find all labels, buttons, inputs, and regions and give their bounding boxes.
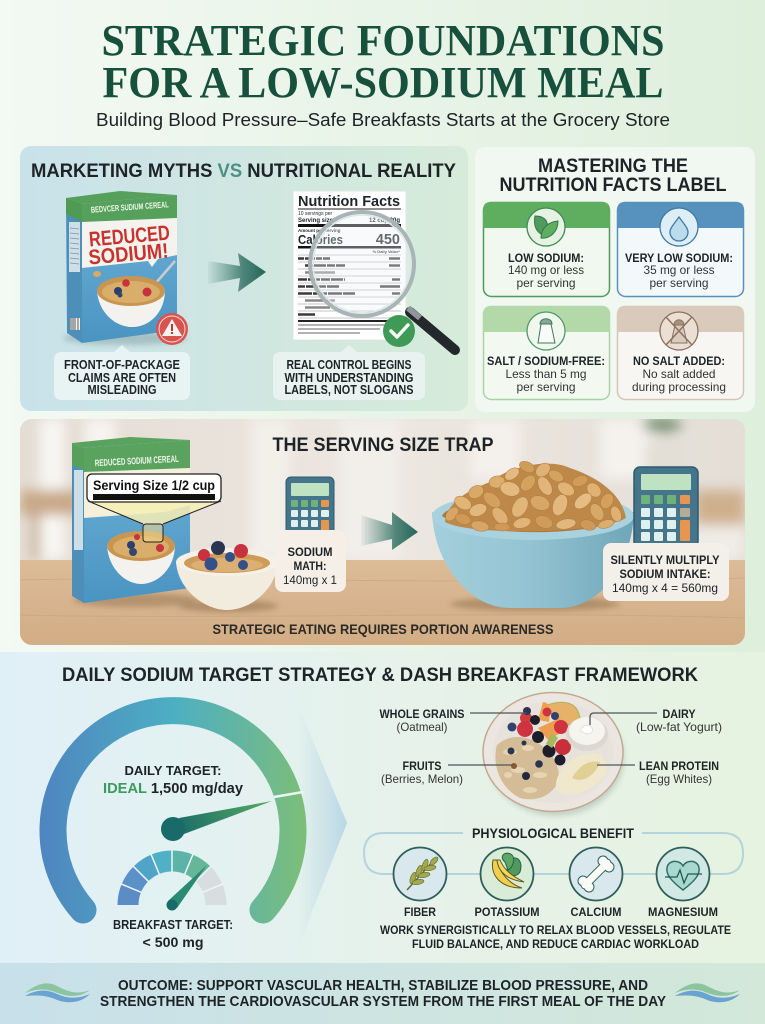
icon: check badge: [383, 315, 415, 347]
nutrient labels: POTASSIUM: [474, 905, 540, 919]
nutrient labels: [404, 905, 718, 919]
physiological benefit track: [364, 826, 743, 874]
icon: left wave: [25, 983, 90, 1002]
small bowl of cereal: [176, 541, 278, 612]
nutrition facts label with magnifier: 450: [376, 232, 400, 248]
subtitle: Building Blood Pressure–Safe Breakfasts Starts at the Grocery Store: [96, 110, 670, 130]
chart: breakfast target gauge: [121, 850, 223, 910]
callout: real control: [273, 345, 425, 400]
panel heading: MARKETING MYTHS VS NUTRITIONAL REALITY: [31, 161, 456, 182]
card: very low sodium: 35 mg or less: [644, 263, 714, 277]
panel: the serving size trap: [20, 417, 745, 645]
callout: whole grains: WHOLE GRAINS: [380, 707, 464, 721]
callout: lean protein: [597, 759, 719, 786]
card: salt sodium free: [483, 306, 610, 400]
panel heading: MASTERING THE: [538, 156, 688, 177]
nutrition facts label with magnifier: Calories: [298, 233, 343, 247]
physiological benefit track: PHYSIOLOGICAL BENEFIT: [472, 826, 635, 841]
callout: real control: REAL CONTROL BEGINS: [286, 358, 412, 372]
card: salt sodium free: Less than 5 mg: [506, 367, 586, 381]
gauge label: [103, 763, 243, 797]
callout: front of package: MISLEADING: [88, 383, 156, 397]
cereal box: reduced sodium claim: REDUCED: [88, 222, 171, 252]
cereal box with serving size callout: [72, 437, 221, 607]
nutrient labels: FIBER: [404, 905, 436, 919]
breakfast target label: < 500 mg: [142, 935, 204, 950]
callout: real control: LABELS, NOT SLOGANS: [284, 383, 414, 397]
callout: dairy: [590, 707, 722, 734]
gauge label: IDEAL 1,500 mg/day: [103, 781, 243, 797]
callout: sodium math: MATH:: [294, 559, 326, 573]
benefit description: [380, 923, 731, 951]
callout: silently multiply: SILENTLY MULTIPLY: [610, 553, 720, 567]
callout: real control: WITH UNDERSTANDING: [284, 371, 414, 385]
card: very low sodium: [617, 202, 744, 296]
nutrition facts label with magnifier: 12 cup 30g: [369, 218, 400, 224]
card: low sodium: [483, 202, 610, 296]
icon: magnesium heart: [656, 848, 710, 900]
cereal box: reduced sodium claim: SODIUM!: [88, 240, 169, 269]
callout: whole grains: (Oatmeal): [396, 720, 448, 734]
card: low sodium: LOW SODIUM:: [508, 251, 584, 265]
callout: whole grains: [380, 707, 527, 734]
breakfast target label: BREAKFAST TARGET:: [113, 918, 233, 932]
gauge needle: [161, 801, 272, 841]
outcome text: STRENGTHEN THE CARDIOVASCULAR SYSTEM FROM THE FIRST MEAL OF THE DAY: [100, 993, 666, 1010]
icon: calcium bone: [570, 848, 622, 900]
card: low sodium: 140 mg or less: [508, 263, 584, 277]
icon: calculator large: [634, 467, 698, 547]
callout: front of package: FRONT-OF-PACKAGE: [64, 358, 180, 372]
title: FOR A LOW-SODIUM MEAL: [102, 58, 664, 107]
callout: lean protein: (Egg Whites): [646, 772, 712, 786]
footer band: outcome: [0, 963, 765, 1024]
nutrition facts label with magnifier: % Daily Value*: [373, 249, 400, 254]
icon: calculator: [286, 476, 334, 530]
nutrition facts label with magnifier: Serving size: [298, 218, 334, 224]
breakfast plate illustration: [483, 692, 624, 816]
section heading: daily sodium target: DAILY SODIUM TARGET STRATEGY & DASH BREAKFAST FRAMEWORK: [62, 665, 698, 686]
title: STRATEGIC FOUNDATIONS: [102, 16, 664, 65]
callout: fruits: [381, 759, 513, 786]
cereal box: reduced sodium claim: [63, 191, 187, 345]
arrow: claim to label: [208, 253, 266, 292]
card: salt sodium free: per serving: [516, 380, 576, 394]
nutrition facts label with magnifier: 10 servings per: [298, 211, 333, 217]
icon: fiber wheat: [394, 848, 446, 900]
callout: sodium math: 140mg x 1: [283, 573, 337, 587]
icon: potassium banana and spinach: [480, 848, 534, 900]
callout: front of package: CLAIMS ARE OFTEN: [68, 371, 176, 385]
benefit description: FLUID BALANCE, AND REDUCE CARDIAC WORKLOAD: [412, 937, 699, 951]
nutrient labels: CALCIUM: [570, 905, 622, 919]
large bowl of cereal: [432, 459, 634, 611]
arrow: small to large portion: [361, 512, 418, 550]
callout: sodium math: SODIUM: [288, 545, 333, 559]
icon: right wave: [675, 983, 740, 1002]
card: very low sodium: VERY LOW SODIUM:: [625, 251, 733, 265]
chart: daily sodium gauge: [53, 711, 303, 910]
oatmeal: [495, 737, 559, 799]
cereal box with serving size callout: Serving Size 1/2 cup: [93, 477, 215, 493]
icon: warning badge: [156, 313, 188, 345]
nutrition facts label with magnifier: [293, 191, 455, 350]
callout: fruits: FRUITS: [402, 759, 442, 773]
card: no salt added: during processing: [632, 380, 726, 394]
nutrition facts label with magnifier: Nutrition Facts: [298, 194, 400, 210]
panel heading: [500, 156, 727, 196]
breakfast target label: [113, 918, 233, 950]
cereal box with serving size callout: REDUCED SODIUM CEREAL: [95, 454, 179, 469]
callout: silently multiply: [603, 543, 729, 601]
title: [102, 16, 664, 107]
gauge label: DAILY TARGET:: [124, 763, 222, 778]
callout: front of package: [54, 345, 190, 400]
caption: portion awareness: STRATEGIC EATING REQUIRES PORTION AWARENESS: [212, 621, 554, 637]
nutrient labels: MAGNESIUM: [648, 905, 718, 919]
card: no salt added: [617, 306, 744, 400]
fruit: [508, 702, 580, 766]
callout: fruits: (Berries, Melon): [381, 772, 463, 786]
card: no salt added: No salt added: [642, 367, 716, 381]
panel: marketing myths vs nutritional reality: [20, 146, 468, 411]
callout: silently multiply: SODIUM INTAKE:: [620, 567, 710, 581]
card: salt sodium free: SALT / SODIUM-FREE:: [487, 354, 605, 368]
callout: lean protein: LEAN PROTEIN: [639, 759, 719, 773]
cereal box: reduced sodium claim: BEDVCER SUDIUM CEREAL: [91, 199, 169, 215]
panel heading: THE SERVING SIZE TRAP: [272, 435, 494, 456]
callout: dairy: (Low-fat Yogurt): [636, 720, 722, 734]
callout: dairy: DAIRY: [662, 707, 696, 721]
card: low sodium: per serving: [516, 276, 576, 290]
outcome text: [100, 977, 666, 1010]
benefit description: WORK SYNERGISTICALLY TO RELAX BLOOD VESSELS, REGULATE: [380, 923, 731, 937]
panel heading: NUTRITION FACTS LABEL: [500, 175, 727, 196]
egg whites: [556, 753, 607, 795]
callout: sodium math: [275, 530, 346, 592]
nutrition facts label with magnifier: Amount per serving: [298, 228, 341, 233]
callout: silently multiply: 140mg x 4 = 560mg: [612, 581, 718, 595]
yogurt: [566, 717, 608, 751]
card: no salt added: NO SALT ADDED:: [633, 354, 725, 368]
card: very low sodium: per serving: [650, 276, 708, 290]
panel: mastering the nutrition facts label: [475, 147, 755, 412]
chevron connector: [297, 703, 347, 950]
outcome text: OUTCOME: SUPPORT VASCULAR HEALTH, STABILIZE BLOOD PRESSURE, AND: [118, 977, 648, 994]
